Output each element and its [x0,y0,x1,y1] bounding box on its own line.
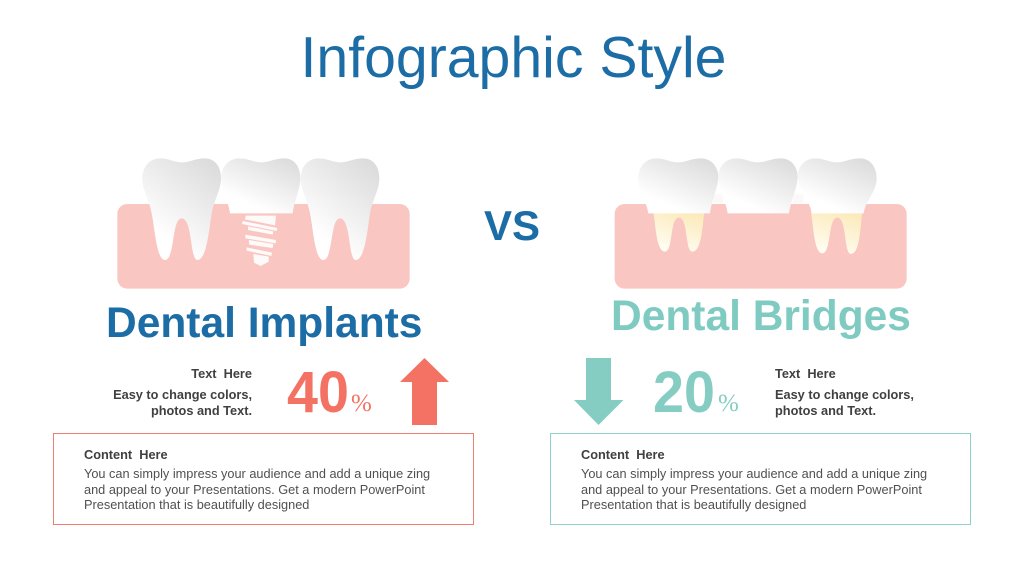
panel text: You can simply impress your audience and add a unique zing [84,466,430,481]
statistic: 20 percent: 20 [653,360,715,425]
right note: Text Here [775,366,836,381]
panel text: You can simply impress your audience and add a unique zing [581,466,927,481]
right note [775,366,914,418]
panel: bridges content [550,433,971,525]
panel heading: Content Here [84,447,168,462]
left note: Text Here [191,366,252,381]
right note: photos and Text. [775,402,876,418]
panel: implants content [53,433,474,525]
left note [113,366,252,418]
arrow up [400,358,449,425]
illustration: dental bridge [614,158,907,289]
panel heading: Content Here [581,447,665,462]
statistic: 40 percent: % [351,390,372,417]
panel text: Presentation that is beautifully designed [581,497,806,512]
statistic: 20 percent: % [718,390,739,417]
vs label: VS [484,202,540,249]
statistic: 40 percent: 40 [287,360,349,425]
title: Infographic Style [300,26,726,90]
panel text [84,466,430,512]
left note: Easy to change colors, [113,387,252,402]
panel text: and appeal to your Presentations. Get a modern PowerPoint [581,482,922,496]
left note: photos and Text. [151,402,252,418]
arrow down [574,358,624,425]
heading: dental implants: Dental Implants [106,300,422,347]
panel text: Presentation that is beautifully designed [84,497,309,512]
illustration: dental implant [117,158,410,289]
heading: dental bridges: Dental Bridges [611,293,911,340]
panel text: and appeal to your Presentations. Get a modern PowerPoint [84,482,425,496]
right note: Easy to change colors, [775,387,914,402]
panel text [581,466,927,512]
